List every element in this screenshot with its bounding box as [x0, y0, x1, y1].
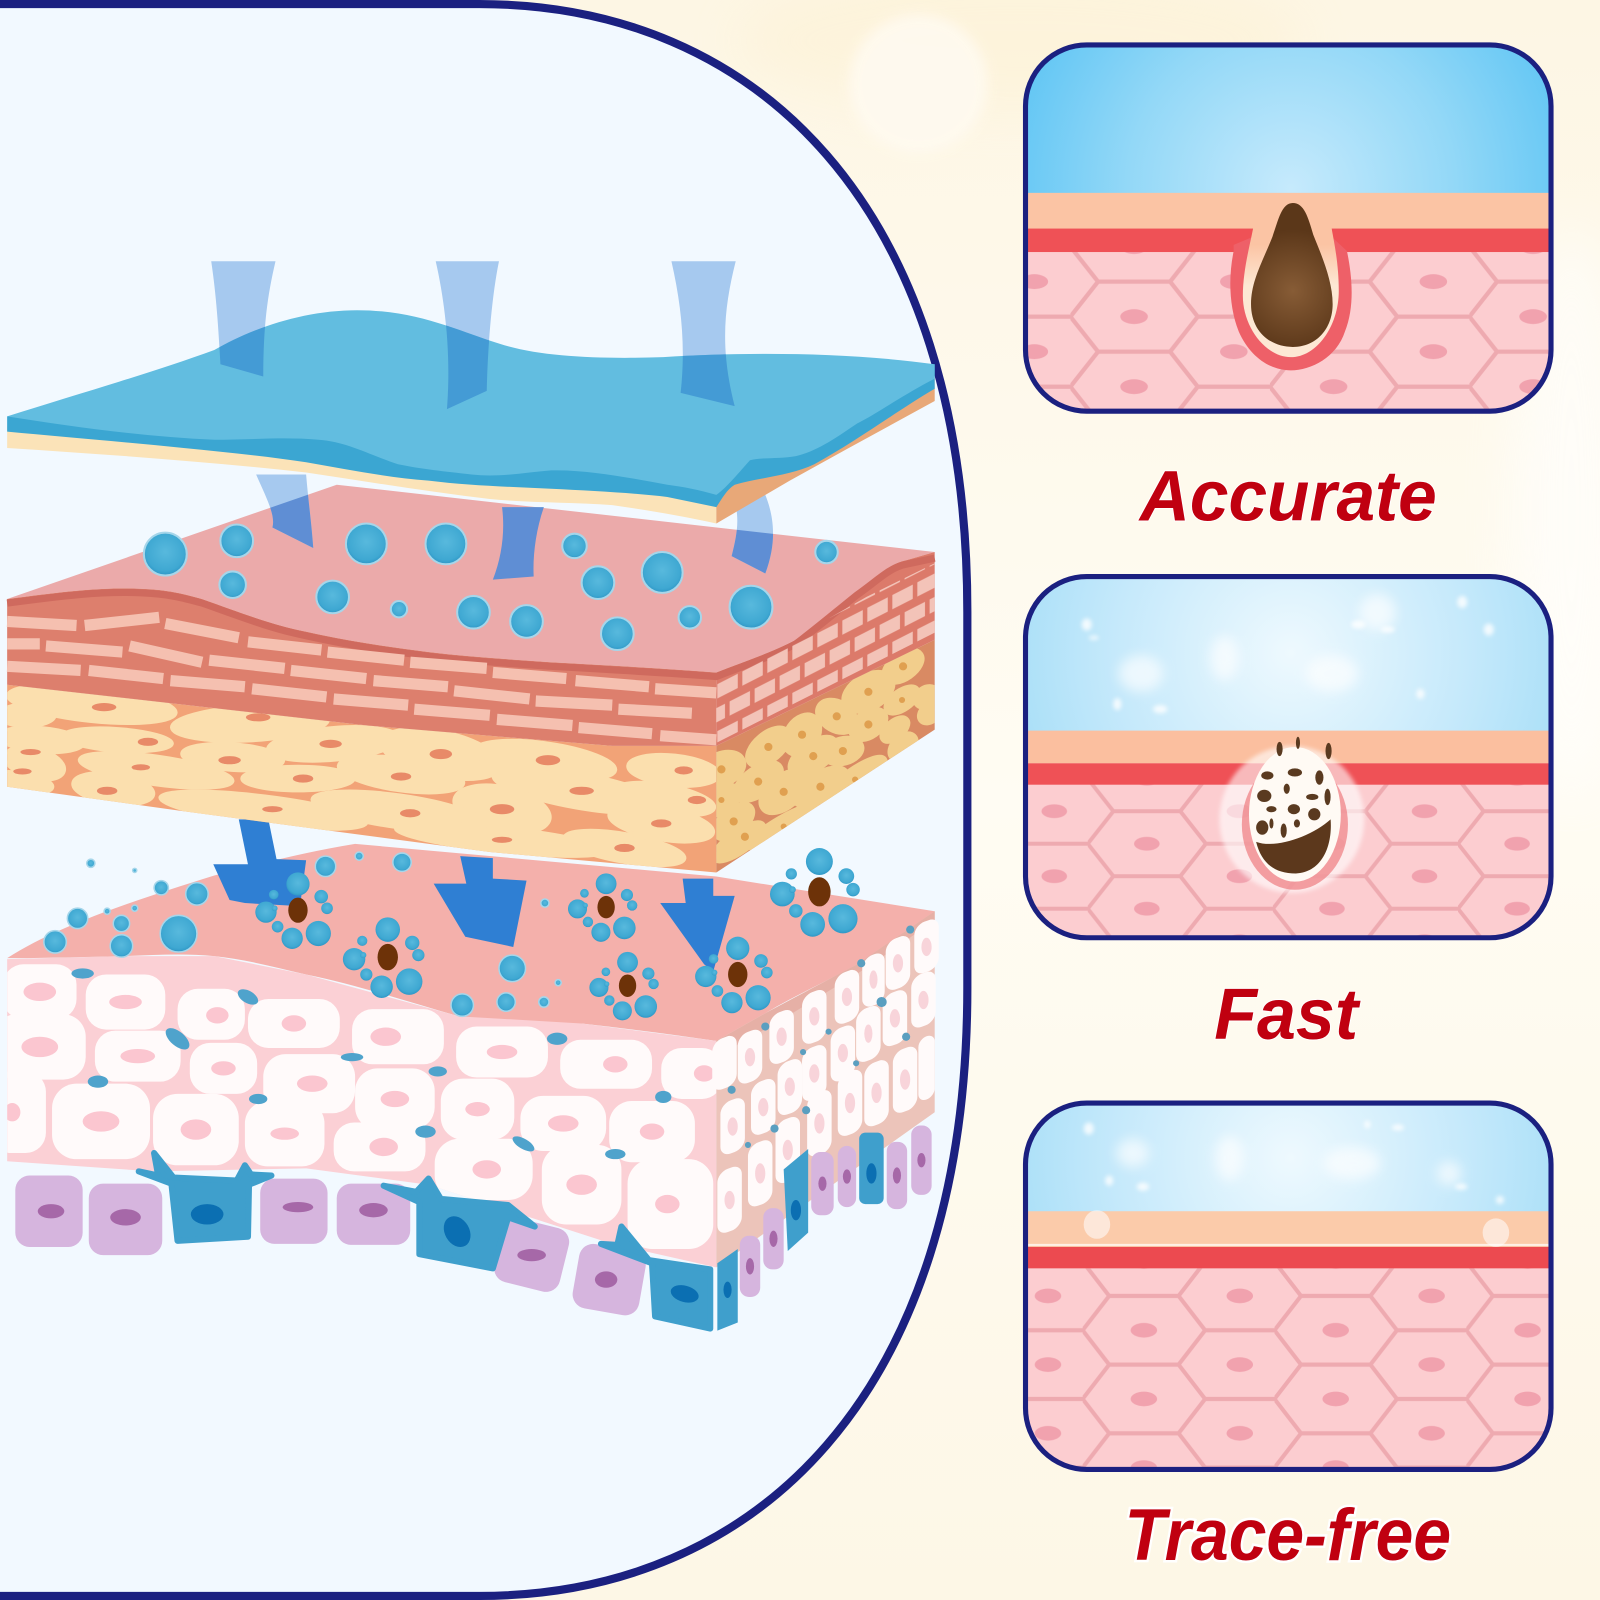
fat side cells — [716, 648, 935, 864]
small blue dots between cells — [71, 968, 671, 1159]
clear skin cross-section — [1023, 1101, 1553, 1472]
fat side face — [716, 640, 935, 872]
water drops on middle block — [144, 523, 838, 650]
fat front face — [7, 685, 716, 872]
label: Accurate: Accurate — [1138, 456, 1437, 536]
arrow: left down arrow — [213, 819, 306, 906]
panel: Trace-free illustration — [1023, 1101, 1553, 1472]
fat nuclei — [13, 703, 706, 852]
film dark rim — [7, 364, 935, 507]
label: Trace-free: Trace-free — [1124, 1493, 1451, 1576]
side cells of lower block — [712, 916, 939, 1236]
brick layer front — [7, 588, 716, 746]
label: Fast: Fast — [1214, 974, 1361, 1055]
ribbon overlap on film — [220, 326, 734, 409]
side basal cells — [717, 1126, 932, 1331]
bricks side — [716, 563, 935, 743]
side junction dots — [728, 926, 914, 1148]
card border — [1026, 577, 1551, 938]
blue cell nuclei — [191, 1204, 701, 1305]
blue film patch — [7, 310, 935, 524]
fat cells — [0, 678, 721, 873]
card border — [1026, 45, 1551, 411]
side face of lower block — [716, 911, 935, 1267]
trapped pigment clusters — [255, 848, 860, 1020]
upper permeating ribbons — [211, 261, 736, 409]
film top surface — [7, 310, 935, 495]
panel: Accurate illustration — [1023, 43, 1553, 414]
white skin cells — [0, 964, 722, 1249]
arrow: right down arrow — [660, 879, 735, 971]
middle skin block: fat layer — [0, 640, 942, 873]
film underside — [7, 427, 716, 523]
brick layer side — [716, 552, 935, 746]
front face of lower block — [7, 956, 716, 1267]
water drops on lower block — [44, 852, 561, 1016]
skin cross-section with pore — [1023, 43, 1553, 414]
film orange edge — [716, 378, 935, 523]
blue basal cells with dendrites — [139, 1153, 710, 1329]
arrow: middle down arrow — [434, 856, 527, 947]
cell nuclei — [4, 983, 714, 1213]
side cell nuclei — [724, 938, 932, 1209]
panel: skin diagram background — [0, 4, 967, 1596]
card border — [1026, 1103, 1551, 1469]
bricks front — [7, 617, 716, 740]
purple basal cells — [15, 1176, 648, 1318]
panel: Fast illustration — [1023, 574, 1553, 942]
skin cross-section with breaking pigment — [1023, 574, 1553, 942]
pink surface — [7, 485, 935, 672]
middle skin block: pink top with brick layer — [7, 485, 935, 746]
side surface strip — [716, 911, 935, 1055]
lower permeating ribbons — [256, 474, 773, 580]
top surface of lower block — [7, 844, 935, 1041]
lower skin block: epidermis cells — [0, 844, 939, 1331]
dark top band — [7, 558, 935, 677]
